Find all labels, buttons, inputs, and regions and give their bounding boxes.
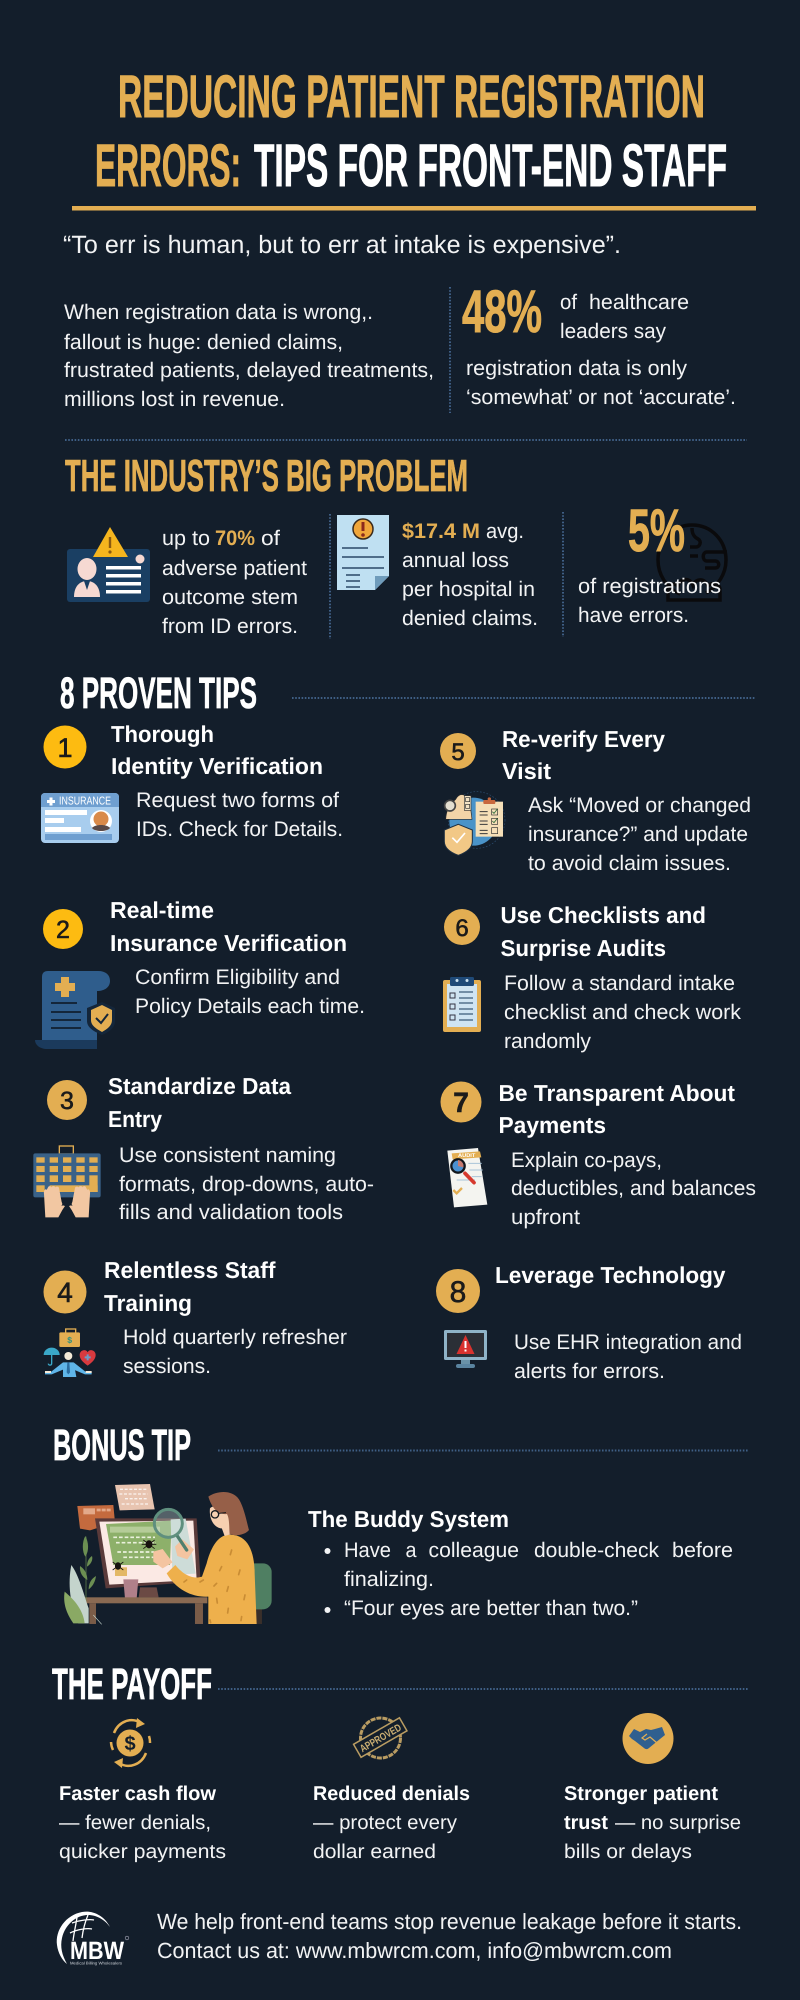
tip 2 heading: Real-time — [110, 897, 214, 923]
stat: 70% adverse outcomes: adverse patient — [162, 557, 307, 580]
footer text: Contact us at: www.mbwrcm.com, info@mbwrcm.com — [157, 1938, 672, 1963]
tip 6 heading: Use Checklists and — [500, 902, 706, 928]
tip 7 heading — [498, 1080, 735, 1138]
tip 6 text: checklist and check work — [504, 1001, 742, 1024]
tip 6 text — [504, 972, 742, 1053]
payoff 3 text: — no surprise — [615, 1812, 741, 1834]
icon: monitor alert — [444, 1330, 487, 1368]
bonus tip text: the buddy system — [308, 1506, 733, 1620]
number badge 8: 8 — [450, 1276, 466, 1309]
stat: 70% adverse outcomes: 70% — [215, 527, 255, 550]
tip 3 — [33, 1073, 374, 1224]
tip 3 text: formats, drop-downs, auto- — [119, 1173, 374, 1196]
intro text block: frustrated patients, delayed treatments, — [64, 359, 434, 382]
tip 5 text: Ask “Moved or changed — [528, 794, 751, 817]
illustration: woman inspecting bugs on a screen — [64, 1484, 272, 1624]
tip 7 text: deductibles, and balances — [511, 1177, 756, 1200]
number badge 3 — [47, 1080, 87, 1120]
icon: ID card with warning — [67, 527, 150, 602]
payoff 2 text — [313, 1783, 470, 1863]
stat: $17.4 M annual loss — [402, 520, 538, 630]
tip 5 text: to avoid claim issues. — [528, 852, 731, 875]
icon: handshake in gold circle — [622, 1713, 674, 1764]
tip 7 text — [511, 1149, 756, 1229]
stat: 48% of healthcare leaders: 48% — [462, 278, 542, 345]
tip 7 heading: Be Transparent About — [498, 1080, 735, 1106]
intro text block: fallout is huge: denied claims, — [64, 331, 343, 354]
stat: 70% adverse outcomes: of — [261, 527, 280, 550]
heading: the industry's big problem: THE INDUSTRY’S BIG PROBLEM — [65, 450, 468, 501]
icon: dollar cycle: $ — [124, 1733, 136, 1755]
tip 4 heading: Relentless Staff — [104, 1257, 276, 1283]
stat: 70% adverse outcomes: up to — [162, 527, 210, 550]
payoff: faster cash flow — [59, 1718, 226, 1863]
tip 8 — [436, 1262, 742, 1383]
number badge 2 — [43, 909, 83, 949]
bonus tip text: the buddy system: “Four eyes are better than two.” — [344, 1597, 638, 1620]
payoff 3 text: trust — [564, 1812, 608, 1834]
icon: person with benefits: $ — [67, 1335, 72, 1345]
tip 5 text: insurance?” and update — [528, 823, 748, 846]
stat: 5% of registrations — [578, 497, 721, 627]
intro text block: millions lost in revenue. — [64, 388, 285, 411]
footer text: We help front-end teams stop revenue leakage before it starts. — [157, 1909, 742, 1934]
number badge 7 — [440, 1082, 482, 1122]
tip 5 heading — [502, 726, 665, 784]
tip 8 heading: Leverage Technology — [495, 1262, 726, 1288]
tip 4 text: Hold quarterly refresher — [123, 1326, 347, 1349]
logo: MBW: Medical Billing Wholesalers — [70, 1960, 122, 1966]
tip 3 heading: Entry — [108, 1106, 162, 1132]
tip 1 text: IDs. Check for Details. — [136, 818, 343, 841]
tip 3 heading — [108, 1073, 291, 1132]
stat: $17.4 M annual loss: annual loss — [402, 549, 509, 572]
tip 7 — [440, 1080, 756, 1229]
payoff 1 text: — fewer denials, — [59, 1812, 211, 1834]
number badge 6: 6 — [455, 915, 469, 942]
tip 2 heading: Insurance Verification — [110, 930, 347, 956]
bonus tip text: the buddy system: double-check — [534, 1539, 659, 1562]
tip 3 text: fills and validation tools — [119, 1201, 343, 1224]
intro text block — [64, 301, 434, 411]
icon: insurance card: INSURANCE — [59, 796, 111, 808]
number badge 5: 5 — [451, 739, 465, 766]
tip 1 heading: Thorough — [111, 721, 214, 747]
stat: 48% of healthcare leaders: leaders say — [560, 320, 666, 343]
tip 1 text: Request two forms of — [136, 789, 339, 812]
payoff 2 text: Reduced denials — [313, 1783, 470, 1805]
number badge 5 — [440, 733, 476, 769]
tip 5 heading: Visit — [502, 758, 551, 784]
title underline — [72, 206, 756, 210]
icon: insurance card — [41, 793, 119, 843]
stat: 70% adverse outcomes: outcome stem — [162, 586, 298, 609]
payoff: reduced denials — [313, 1718, 470, 1863]
number badge 4: 4 — [57, 1277, 73, 1308]
tip 6 text: randomly — [504, 1030, 591, 1053]
bonus tip text: the buddy system: Have — [344, 1539, 391, 1562]
tip 5 text — [528, 794, 751, 875]
stat: 5% of registrations: have errors. — [578, 604, 689, 627]
number badge 7: 7 — [453, 1087, 469, 1118]
payoff 1 text: quicker payments — [59, 1841, 226, 1863]
number badge 4 — [44, 1270, 86, 1314]
icon: keyboard and hands — [33, 1146, 101, 1217]
stat: 5% of registrations: 5% — [628, 497, 685, 564]
stat: $17.4 M annual loss: avg. — [486, 520, 524, 543]
quote: “To err is human, but to err at intake is expensive”. — [63, 231, 621, 259]
payoff 3 text: Stronger patient — [564, 1783, 718, 1805]
tip 8 text — [514, 1331, 742, 1383]
intro text block: When registration data is wrong,. — [64, 301, 373, 324]
tip 7 text: upfront — [511, 1206, 580, 1229]
number badge 2: 2 — [56, 916, 70, 944]
tip 4 text: sessions. — [123, 1355, 211, 1378]
tip 1 heading — [111, 721, 323, 779]
stat: 70% adverse outcomes — [162, 527, 307, 638]
icon: black outlined globe — [658, 525, 727, 600]
tip 4 heading — [104, 1257, 276, 1316]
stat: $17.4 M annual loss: per hospital in — [402, 578, 535, 601]
stat: 48% of healthcare leaders: ‘somewhat’ or not ‘accurate’. — [466, 386, 736, 409]
stat: $17.4 M annual loss: denied claims. — [402, 607, 538, 630]
number badge 6 — [444, 909, 480, 945]
tip 6 text: Follow a standard intake — [504, 972, 735, 995]
payoff 3 text — [564, 1783, 741, 1863]
number badge 8 — [436, 1269, 480, 1313]
tip 4 heading: Training — [104, 1290, 192, 1316]
number badge 1 — [44, 726, 86, 768]
heading: bonus tip: BONUS TIP — [53, 1421, 191, 1470]
number badge 1: 1 — [57, 733, 73, 763]
icon: checklist clipboard — [443, 977, 481, 1032]
bonus tip text: the buddy system: finalizing. — [344, 1568, 434, 1591]
payoff 1 text: Faster cash flow — [59, 1783, 216, 1805]
tip 8 text: Use EHR integration and — [514, 1331, 742, 1354]
stat: 48% of healthcare leaders — [462, 278, 736, 409]
tip 3 heading: Standardize Data — [108, 1073, 291, 1099]
tip 4 text — [123, 1326, 347, 1378]
tip 1 text — [136, 789, 343, 841]
footer text — [157, 1909, 742, 1963]
tip 3 text — [119, 1144, 374, 1224]
bonus tip text: the buddy system: colleague — [428, 1539, 519, 1562]
tip 2 heading — [110, 897, 347, 956]
tip 5 heading: Re-verify Every — [502, 726, 665, 752]
stat: 48% of healthcare leaders: healthcare — [589, 291, 689, 314]
icon: audit report: AUDIT — [458, 1153, 475, 1158]
tip 6 heading: Surprise Audits — [500, 935, 666, 961]
logo: MBW — [57, 1912, 129, 1966]
payoff 3 text: bills or delays — [564, 1841, 692, 1863]
payoff 2 text: — protect every — [313, 1812, 457, 1834]
stat: 48% of healthcare leaders: registration data is only — [466, 357, 688, 380]
heading: the payoff: THE PAYOFF — [52, 1660, 212, 1709]
tip 7 text: Explain co-pays, — [511, 1149, 662, 1172]
tip 7 heading: Payments — [498, 1112, 606, 1138]
bonus tip text: the buddy system: before — [672, 1539, 733, 1562]
icon: audit report — [447, 1148, 487, 1207]
stat: 70% adverse outcomes: from ID errors. — [162, 615, 298, 638]
tip 6 heading — [500, 902, 706, 961]
tip 2 text: Policy Details each time. — [135, 995, 365, 1018]
tip 2 text — [135, 966, 365, 1018]
bonus tip text: the buddy system: a — [406, 1539, 417, 1562]
logo: MBW: MBW — [70, 1937, 124, 1965]
icon: policy scroll with shield — [35, 971, 115, 1049]
tip 2 — [35, 897, 365, 1049]
stat: $17.4 M annual loss: $17.4 M — [402, 520, 480, 543]
tip 5 — [440, 726, 751, 875]
tip 8 text: alerts for errors. — [514, 1360, 665, 1383]
tip 1 — [41, 721, 343, 843]
icon: approved stamp: APPROVED — [358, 1722, 404, 1755]
icon: person with benefits — [44, 1329, 96, 1377]
icon: alert document — [337, 515, 389, 590]
payoff 2 text: dollar earned — [313, 1841, 436, 1863]
number badge 3: 3 — [60, 1087, 74, 1115]
payoff: stronger patient trust — [564, 1713, 741, 1863]
heading: 8 proven tips: 8 PROVEN TIPS — [60, 669, 257, 718]
payoff 1 text — [59, 1783, 226, 1863]
title — [95, 63, 727, 199]
icon: verification clipboard and shield — [444, 792, 505, 855]
stat: 48% of healthcare leaders: of — [560, 291, 577, 314]
tip 6 — [443, 902, 742, 1053]
icon: dollar cycle — [111, 1718, 150, 1768]
stat: 5% of registrations: of registrations — [578, 575, 721, 598]
tip 2 text: Confirm Eligibility and — [135, 966, 340, 989]
tip 3 text: Use consistent naming — [119, 1144, 336, 1167]
tip 1 heading: Identity Verification — [111, 753, 323, 779]
bonus tip text: the buddy system: The Buddy System — [308, 1506, 509, 1532]
tip 4 — [44, 1257, 347, 1378]
title: ERRORS: — [95, 132, 241, 199]
